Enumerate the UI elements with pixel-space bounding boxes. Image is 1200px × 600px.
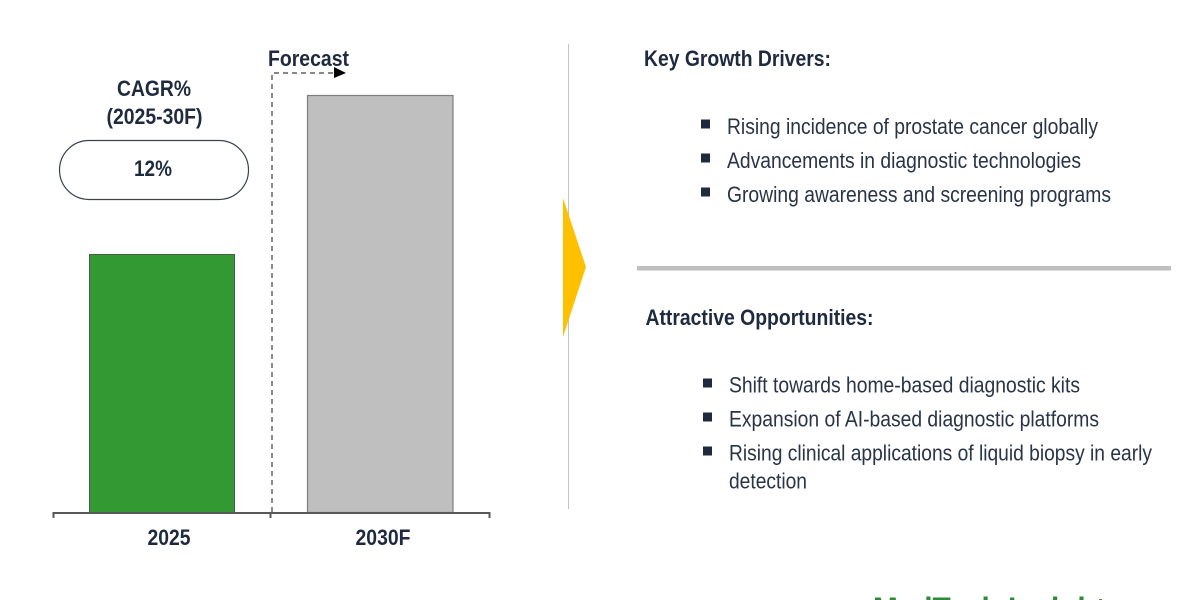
panel: bar chart xyxy=(54,46,490,550)
CAGR pill: 12% xyxy=(134,156,172,181)
heading: attractive opportunities: Attractive Opportunities: xyxy=(646,305,874,330)
label: CAGR xyxy=(106,76,202,129)
bar: 2025 xyxy=(90,254,234,512)
bar: 2030F xyxy=(308,96,453,512)
label: CAGR: (2025-30F) xyxy=(106,104,202,129)
bullet list: drivers xyxy=(701,114,1111,207)
bullet list: opportunities: Expansion of AI-based diagnostic platforms xyxy=(729,406,1099,432)
vertical divider xyxy=(568,44,569,509)
panel: attractive opportunities xyxy=(646,305,1153,494)
bullet list: opportunities: detection xyxy=(729,468,807,494)
bullet list: drivers: Growing awareness and screening programs xyxy=(727,182,1111,207)
horizontal divider xyxy=(637,266,1171,270)
heading: key growth drivers: Key Growth Drivers: xyxy=(644,46,831,71)
label: 2025: 2025 xyxy=(148,525,190,550)
CAGR pill xyxy=(60,140,248,200)
bullet list: drivers: Rising incidence of prostate cancer globally xyxy=(727,114,1099,139)
label: 2030F: 2030F xyxy=(356,525,410,550)
forecast divider arrow xyxy=(272,67,346,512)
arrow: chevron xyxy=(563,198,586,337)
panel: key growth drivers xyxy=(644,46,1111,207)
chart axis xyxy=(54,513,490,518)
label: Forecast: Forecast xyxy=(268,46,349,71)
bullet list: opportunities: Shift towards home-based diagnostic kits xyxy=(729,372,1080,398)
label: CAGR: CAGR% xyxy=(117,76,191,101)
bullet list: drivers: Advancements in diagnostic technologies xyxy=(727,148,1081,173)
bullet list: opportunities xyxy=(703,372,1153,494)
